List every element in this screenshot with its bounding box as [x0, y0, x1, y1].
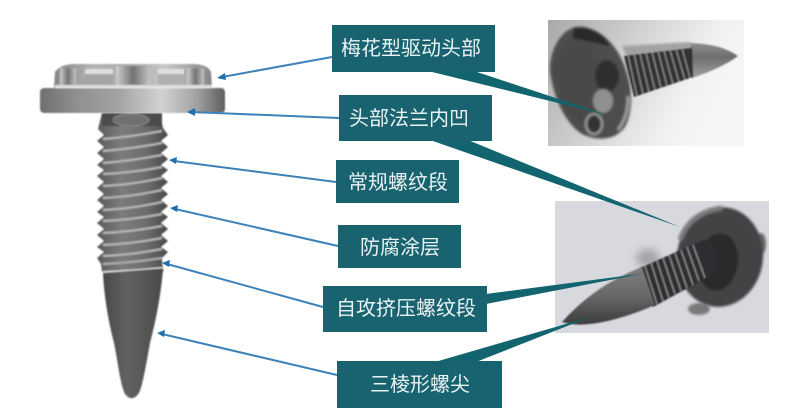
- label: torx drive head: [332, 25, 495, 72]
- flange disc: [670, 202, 770, 312]
- label: trilobular tip: [337, 361, 502, 408]
- label: flange recess: [339, 95, 492, 141]
- label: regular thread: [336, 160, 459, 203]
- screw flange: [40, 88, 225, 113]
- label: anticorrosion coating: [338, 225, 461, 268]
- threads: [640, 240, 718, 307]
- label: torx drive head: 梅花型驱动头部: [341, 37, 481, 60]
- screw torx drive head: [54, 64, 212, 88]
- callout wedges from labels to photos: [428, 71, 680, 362]
- photo screw tip: [690, 43, 738, 78]
- label: regular thread: 常规螺纹段: [348, 171, 448, 194]
- leader arrows to main screw: [157, 57, 339, 375]
- screw triangular tip: [103, 269, 163, 398]
- photo: torx head close-up: [548, 20, 744, 146]
- photo: flange underside close-up: [555, 201, 770, 333]
- label: trilobular tip: 三棱形螺尖: [370, 373, 470, 396]
- label: self-tapping thread: [323, 286, 487, 332]
- photo screw head: [550, 27, 631, 139]
- photo screw threads: [624, 48, 693, 97]
- label: self-tapping thread: 自攻挤压螺纹段: [336, 297, 476, 320]
- pointed tip: [562, 267, 655, 325]
- label: flange recess: 头部法兰内凹: [349, 107, 469, 130]
- label: anticorrosion coating: 防腐涂层: [360, 236, 440, 259]
- screw thread section: [97, 113, 168, 272]
- diagram: main screw: [40, 64, 225, 398]
